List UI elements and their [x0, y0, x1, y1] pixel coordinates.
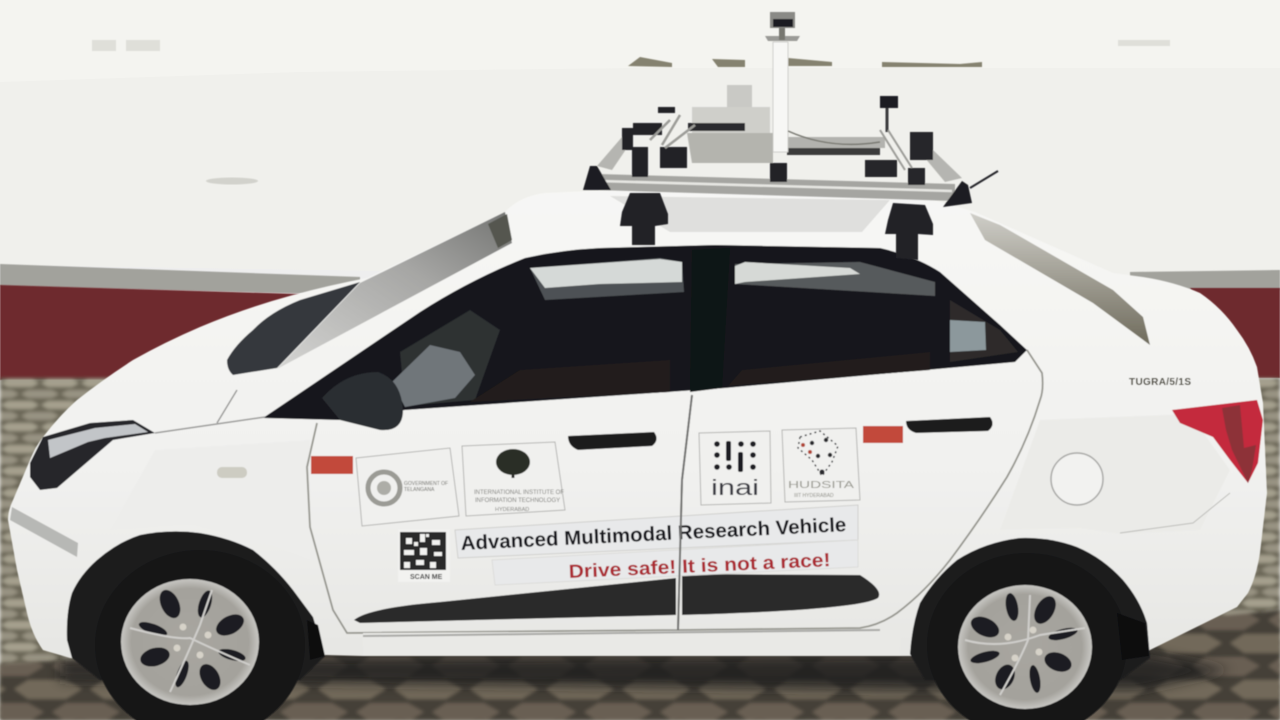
windscreen cowl: [227, 282, 360, 375]
sticker: IIIT Hyderabad: INFORMATION TECHNOLOGY: [475, 498, 560, 504]
sticker: QR code: [398, 529, 450, 582]
rear bumper seam: [1120, 493, 1230, 533]
rear struts: [880, 130, 912, 170]
sticker: government seal: GOVERNMENT OF: [404, 481, 448, 487]
rack rear rail: [787, 137, 885, 148]
windscreen dark corner: [488, 214, 512, 248]
background: distant rooftops: [92, 40, 1170, 67]
black side moulding rear: [682, 574, 879, 615]
sensor stack: [727, 85, 752, 112]
left roof clamp: [620, 193, 668, 245]
left cameras: [622, 107, 687, 177]
left camera struts: [650, 115, 695, 148]
background: cobbled ground: [0, 378, 1280, 720]
car: [8, 186, 1267, 720]
side windows frame: [263, 245, 1027, 420]
fuel cap: [1051, 453, 1103, 505]
lower quarter shade: [1000, 414, 1230, 534]
car body: [8, 186, 1267, 660]
hood seam: [155, 390, 265, 433]
rack front bar: [598, 174, 955, 201]
lower sill: [363, 630, 900, 656]
sticker: HUDSITA: IIIT HYDERABAD: [794, 493, 834, 499]
fender shade: [110, 440, 310, 560]
background: white wall top band: [0, 0, 1280, 82]
sticker: QR code: SCAN ME: [410, 574, 443, 581]
antenna: [970, 171, 998, 188]
rear sensors: [865, 132, 933, 185]
front mud flap: [307, 620, 325, 660]
front wheel arch: [67, 531, 325, 680]
door pillar: [690, 248, 730, 392]
mast: [773, 42, 788, 152]
sensor bar: [688, 123, 745, 131]
background: kerb: [0, 264, 1280, 295]
banner: Advanced Multimodal Research Vehicle: Advanced Multimodal Research Vehicle: [460, 514, 847, 555]
banner: Drive safe! It is not a race!: Drive safe! It is not a race!: [568, 550, 831, 583]
model badge: TUGRA/5/1S: [1129, 377, 1191, 388]
tail light: [1172, 400, 1263, 483]
cable: [788, 131, 880, 144]
front reflector strip: [10, 507, 78, 557]
background: red wall: [0, 285, 1280, 380]
front door handle: [568, 432, 657, 450]
rear window: [970, 213, 1150, 345]
sill line: [363, 630, 880, 636]
sticker: government seal: [356, 448, 459, 526]
tail light lens: [1222, 405, 1256, 483]
door seam over stickers: [678, 395, 692, 630]
bar end caps: [583, 166, 972, 207]
sticker: IIIT Hyderabad: INTERNATIONAL INSTITUTE OF: [474, 490, 564, 496]
rack side rails: [597, 137, 962, 182]
sticker: government seal: TELANGANA: [404, 487, 435, 493]
lidar head: [765, 12, 800, 41]
rear wheel: [927, 553, 1127, 720]
headlight: [30, 420, 155, 490]
sticker: inai: inai: [711, 475, 759, 500]
windscreen glass: [277, 212, 512, 369]
black side moulding: [354, 578, 676, 623]
rear door glass: [728, 262, 1018, 386]
rear wheel arch: [910, 538, 1150, 680]
rear camera: [880, 96, 898, 108]
red tape right: [863, 426, 903, 443]
sticker: HUDSITA: HUDSITA: [788, 480, 854, 491]
front wheel: [95, 550, 305, 720]
wing mirror: [322, 372, 403, 430]
rear door handle: [906, 417, 993, 433]
rack rear rail lower: [787, 148, 880, 155]
rack bar highlight: [600, 181, 952, 191]
car shadow: [60, 654, 1230, 690]
background: wall stain: [206, 178, 258, 184]
background: near cobbles: [0, 610, 1280, 720]
sticker: inai: [699, 431, 771, 505]
right roof clamp: [885, 203, 933, 260]
mast base mount: [770, 163, 787, 182]
banner: Drive safe! It is not a race!: [492, 540, 858, 585]
roof rack with sensors: [583, 12, 998, 260]
sticker: HUDSITA: [782, 428, 860, 502]
background: wall ledge: [0, 68, 1280, 285]
sensor top plate: [692, 107, 770, 133]
sticker: IIIT Hyderabad: [462, 442, 565, 516]
sticker: IIIT Hyderabad: HYDERABAD: [495, 507, 529, 513]
sensor box: [687, 133, 773, 163]
door outline: [307, 350, 1043, 633]
headlight reflection: [48, 424, 148, 458]
indicator: [217, 467, 247, 478]
rear mud flap: [1117, 613, 1149, 660]
red tape left: [311, 456, 353, 474]
roof reflection: [610, 196, 890, 232]
front door glass: [392, 258, 684, 407]
